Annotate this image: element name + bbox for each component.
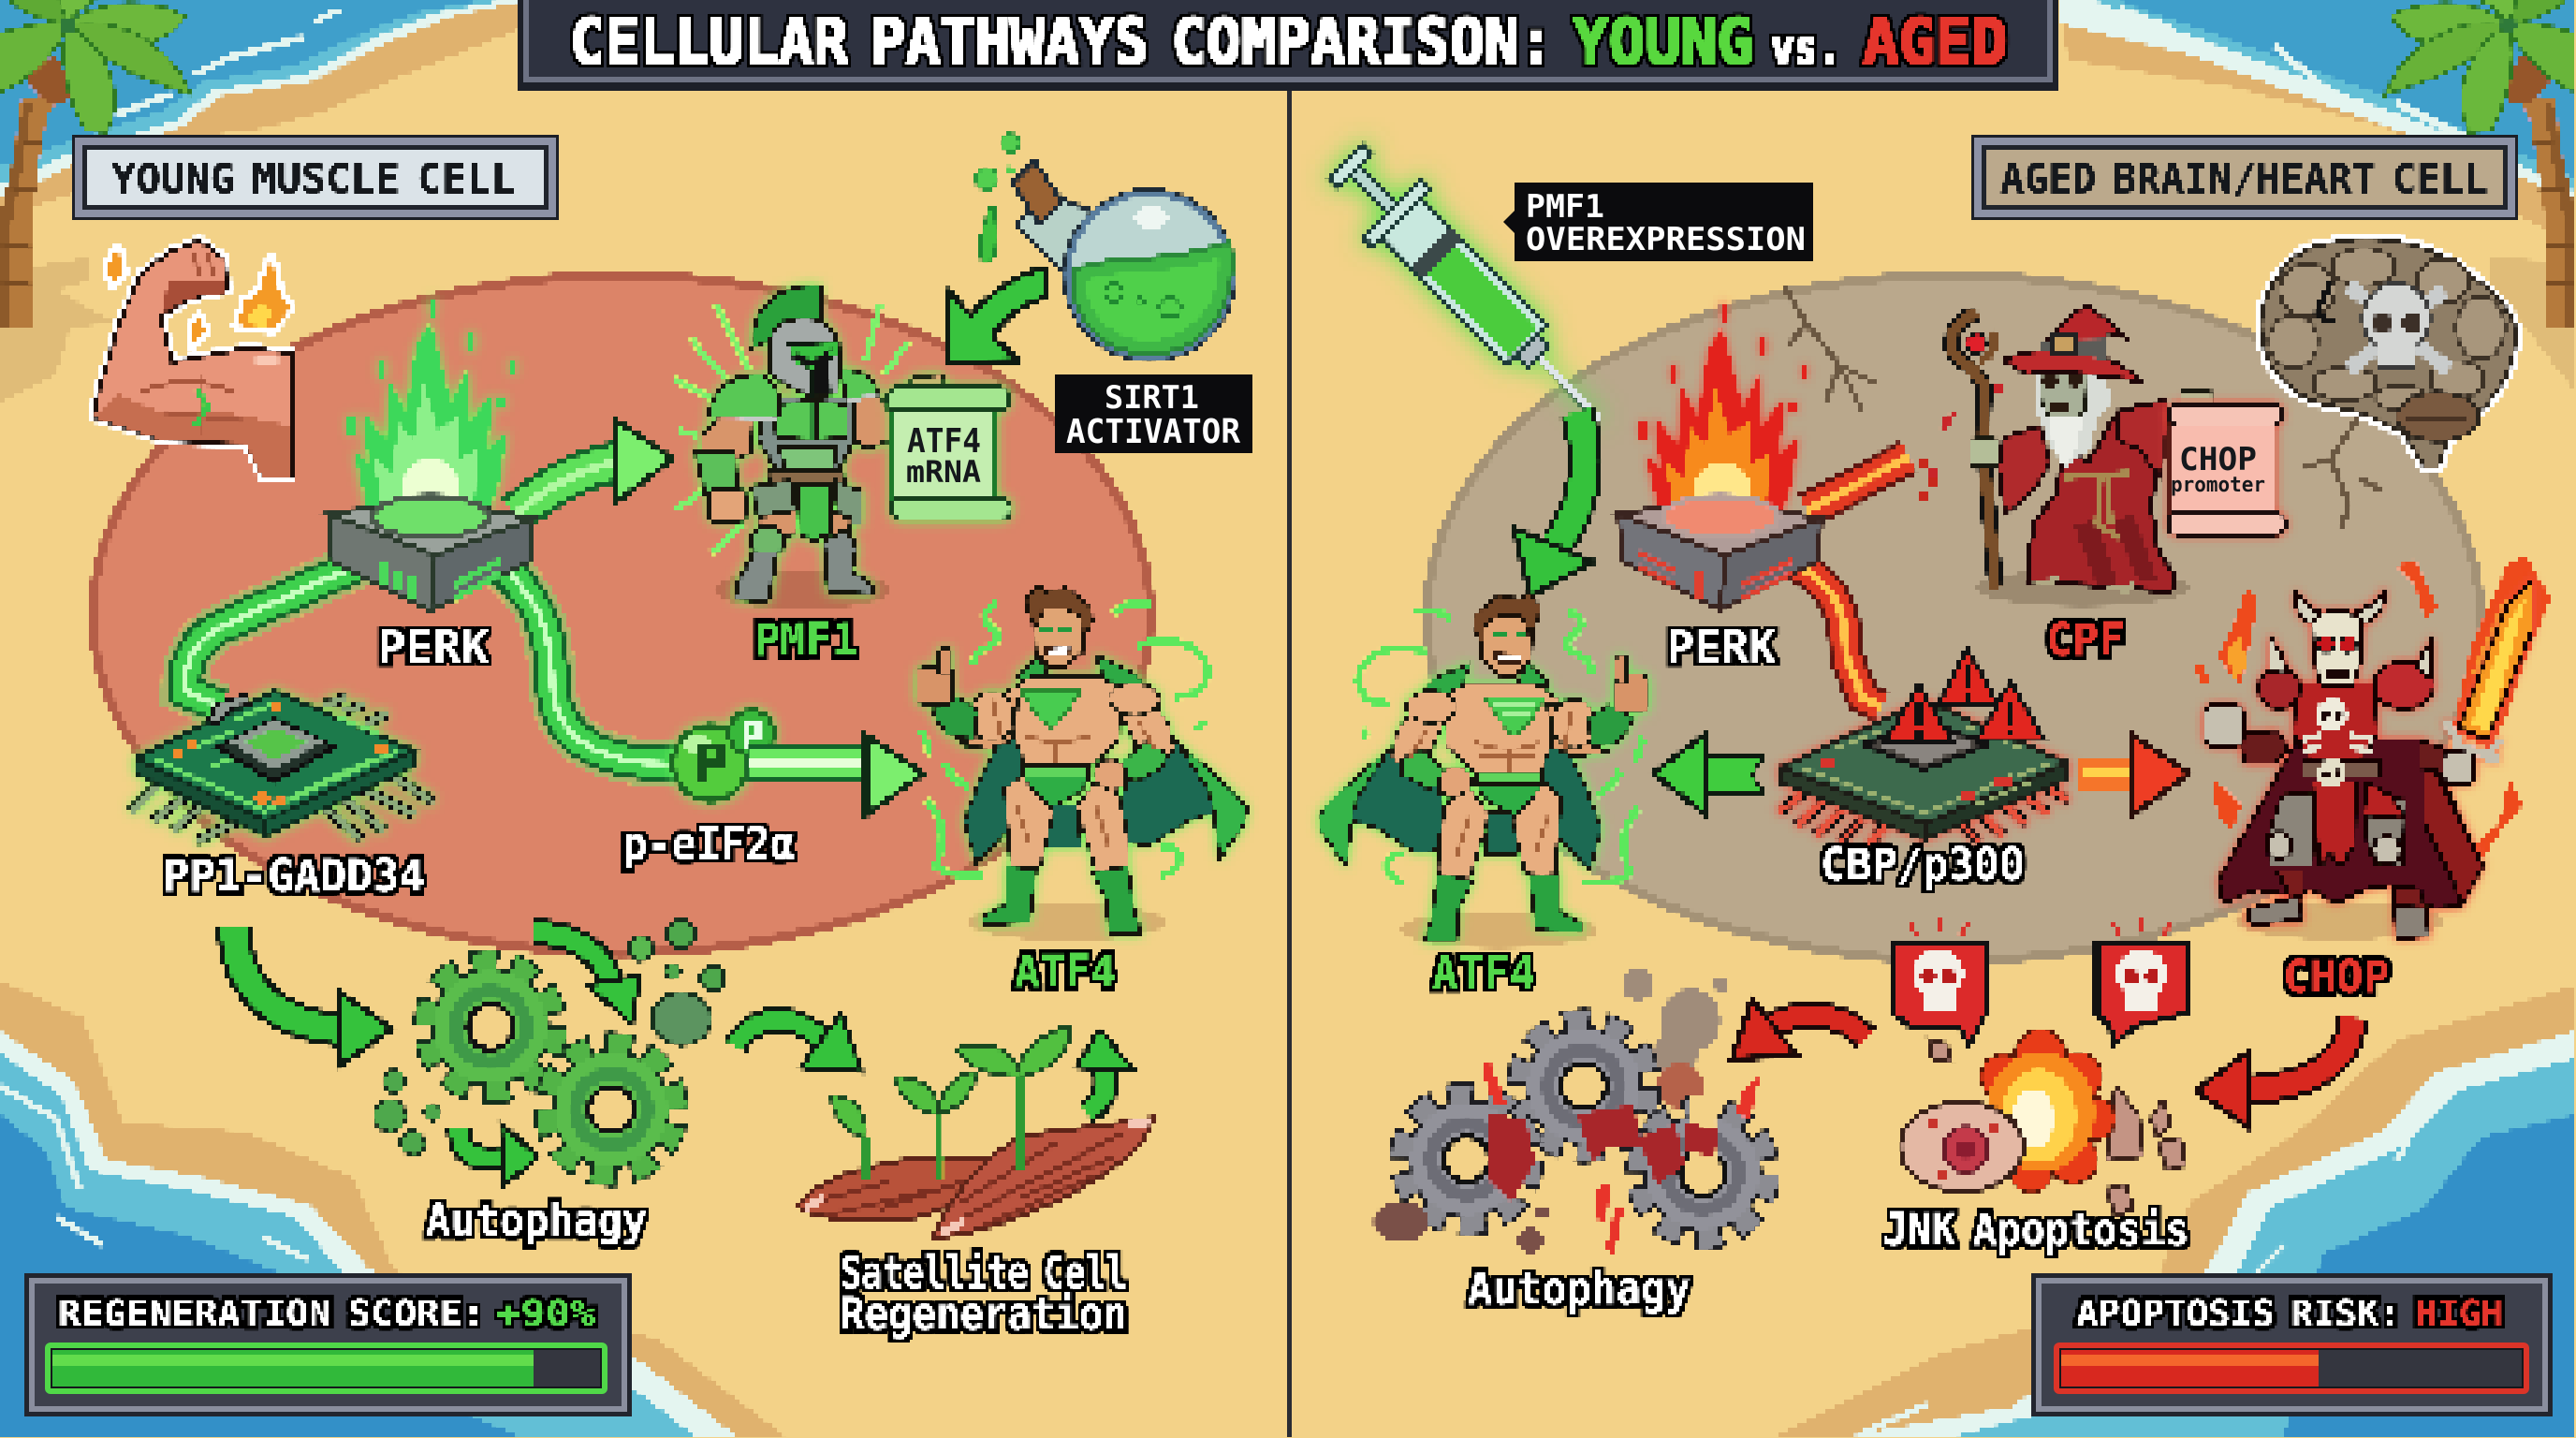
ocean: top right corner bbox=[2059, 0, 2576, 245]
scroll text: CHOP promoter: promoter bbox=[2171, 474, 2265, 497]
callout: SIRT1 activator bbox=[1055, 374, 1252, 453]
palm shadow left bbox=[0, 257, 117, 403]
label: CPF: CPF bbox=[2046, 614, 2125, 667]
label: CHOP: CHOP bbox=[2283, 951, 2390, 1004]
label: PP1-GADD34: PP1-GADD34 bbox=[163, 850, 425, 902]
icon: phosphate spheres p-eIF2a bbox=[673, 711, 774, 800]
label: PMF1: PMF1 bbox=[754, 614, 857, 667]
label: ATF4 (aged): ATF4 bbox=[1432, 947, 1535, 1000]
panel: apoptosis risk bbox=[2031, 1273, 2553, 1416]
palm tree right bbox=[2384, 0, 2576, 328]
character: ATF4 superhero (aged) bbox=[1319, 593, 1648, 948]
label: Satellite Cell Regeneration: Regeneration bbox=[841, 1288, 1127, 1341]
score caption: REGENERATION SCORE: bbox=[58, 1293, 485, 1334]
arrow: debris into gears bbox=[534, 932, 640, 1024]
cell: aged brain/heart bbox=[1427, 275, 2481, 961]
icon: syringe bbox=[1317, 133, 1629, 448]
icon: JNK apoptosis explosion bbox=[1900, 1030, 2186, 1217]
score caption: +90% bbox=[496, 1293, 595, 1334]
heading: aged brain/heart cell bbox=[1971, 135, 2518, 220]
character: CHOP demon warrior bbox=[2195, 557, 2551, 940]
title text: CELLULAR PATHWAYS COMPARISON: bbox=[570, 6, 1554, 80]
character: ATF4 superhero (young) bbox=[917, 585, 1247, 941]
label: Autophagy (aged): Autophagy bbox=[1468, 1263, 1690, 1315]
gears: autophagy (young) bbox=[374, 920, 724, 1186]
title text: AGED bbox=[1863, 6, 2008, 80]
label: PERK (young): PERK bbox=[378, 622, 489, 674]
palm shadow right bbox=[2490, 257, 2576, 393]
risk caption: APOPTOSIS RISK: bbox=[2076, 1293, 2401, 1334]
arrow: PP1-GADD34 to autophagy bbox=[234, 925, 392, 1067]
smoke bbox=[1622, 969, 1728, 1108]
icon: potion flask bbox=[975, 134, 1236, 361]
pipes: PERK outputs (aged) bbox=[1789, 457, 1936, 707]
character: PMF1 knight bbox=[674, 286, 948, 609]
scroll: CHOP promoter bbox=[2168, 404, 2286, 535]
arrow: CHOP to apoptosis bbox=[2195, 1018, 2353, 1127]
label: p-eIF2alpha: p-eIF2α bbox=[622, 818, 795, 871]
callout: SIRT1 activator: ACTIVATOR bbox=[1066, 413, 1240, 451]
arrow: regrowth up bbox=[1076, 1029, 1134, 1112]
panel: regeneration score bbox=[24, 1273, 632, 1416]
icon: flexing arm bbox=[94, 241, 291, 477]
title text: YOUNG bbox=[1573, 6, 1753, 80]
arrow: chip to CHOP bbox=[2076, 735, 2189, 815]
scroll text: CHOP promoter: CHOP bbox=[2179, 441, 2257, 478]
label: PERK (aged): PERK bbox=[1667, 622, 1776, 674]
title text: vs. bbox=[1771, 21, 1840, 75]
heading: aged brain/heart cell: AGED BRAIN/HEART CELL bbox=[2000, 155, 2488, 203]
character: CPF zombie wizard bbox=[1926, 306, 2213, 607]
arrow: small recycling arrow bbox=[460, 1123, 538, 1187]
flames around the demon bbox=[2195, 557, 2551, 861]
arrow: autophagy to regeneration bbox=[735, 1013, 862, 1072]
title banner bbox=[518, 0, 2058, 91]
scroll text: ATF4 mRNA: mRNA bbox=[906, 454, 981, 490]
label: CBP/p300: CBP/p300 bbox=[1821, 839, 2025, 891]
pipes and arrows: PERK outputs (young) bbox=[184, 420, 674, 764]
scroll: ATF4 mRNA bbox=[887, 387, 1011, 520]
icon: CBP/p300 chip with warnings bbox=[1778, 649, 2069, 847]
ocean: bottom right corner bbox=[1772, 985, 2576, 1438]
icon: PERK flame and console (young) bbox=[329, 298, 534, 610]
callout: skull alerts bbox=[1892, 916, 2187, 1045]
heading: young muscle cell bbox=[72, 135, 559, 220]
label: ATF4 (young): ATF4 bbox=[1015, 946, 1116, 998]
risk caption: HIGH bbox=[2415, 1293, 2503, 1334]
callout: SIRT1 activator: SIRT1 bbox=[1105, 379, 1199, 417]
scroll text: ATF4 mRNA: ATF4 bbox=[907, 422, 981, 461]
arrow: apoptosis to gears bbox=[1732, 999, 1866, 1059]
progress bar: regeneration bbox=[45, 1343, 607, 1394]
icon: muscle fibres with sprouts bbox=[797, 1025, 1153, 1238]
label: JNK Apoptosis: JNK Apoptosis bbox=[1883, 1204, 2189, 1256]
ocean: top left corner bbox=[0, 0, 571, 217]
arrow: chip to ATF4 bbox=[1653, 733, 1764, 815]
callout: PMF1 overexpression: OVEREXPRESSION bbox=[1526, 221, 1806, 258]
cell: young muscle bbox=[93, 275, 1150, 953]
progress bar: apoptosis bbox=[2054, 1343, 2529, 1394]
pathway labels layer bbox=[163, 614, 2390, 1341]
callout: PMF1 overexpression: PMF1 bbox=[1526, 188, 1604, 226]
ocean: bottom left corner bbox=[0, 980, 788, 1438]
icon: PP1-GADD34 chip bbox=[131, 691, 433, 841]
gears: broken autophagy (aged) bbox=[1373, 1021, 1767, 1255]
icon: PERK flame and console (aged) bbox=[1618, 302, 1822, 610]
heading: young muscle cell: YOUNG MUSCLE CELL bbox=[111, 155, 516, 203]
label: Satellite Cell Regeneration bbox=[841, 1247, 1127, 1341]
scroll text: CHOP promoter bbox=[2171, 441, 2265, 497]
arrow: p-eIF2a to ATF4 bbox=[749, 735, 924, 815]
divider bbox=[1285, 91, 1292, 1438]
palm tree left bbox=[0, 0, 192, 328]
scroll text: ATF4 mRNA bbox=[906, 422, 981, 490]
label: Autophagy (young): Autophagy bbox=[426, 1195, 647, 1247]
label: Satellite Cell Regeneration: Satellite Cell bbox=[841, 1247, 1127, 1299]
arrow: syringe to ATF4 bbox=[1514, 412, 1593, 596]
callout: PMF1 overexpression bbox=[1503, 183, 1813, 261]
pipe collar at chip bbox=[208, 695, 251, 723]
arrow: flask to scroll bbox=[948, 268, 1045, 362]
icon: damaged brain with skull bbox=[2261, 239, 2515, 468]
